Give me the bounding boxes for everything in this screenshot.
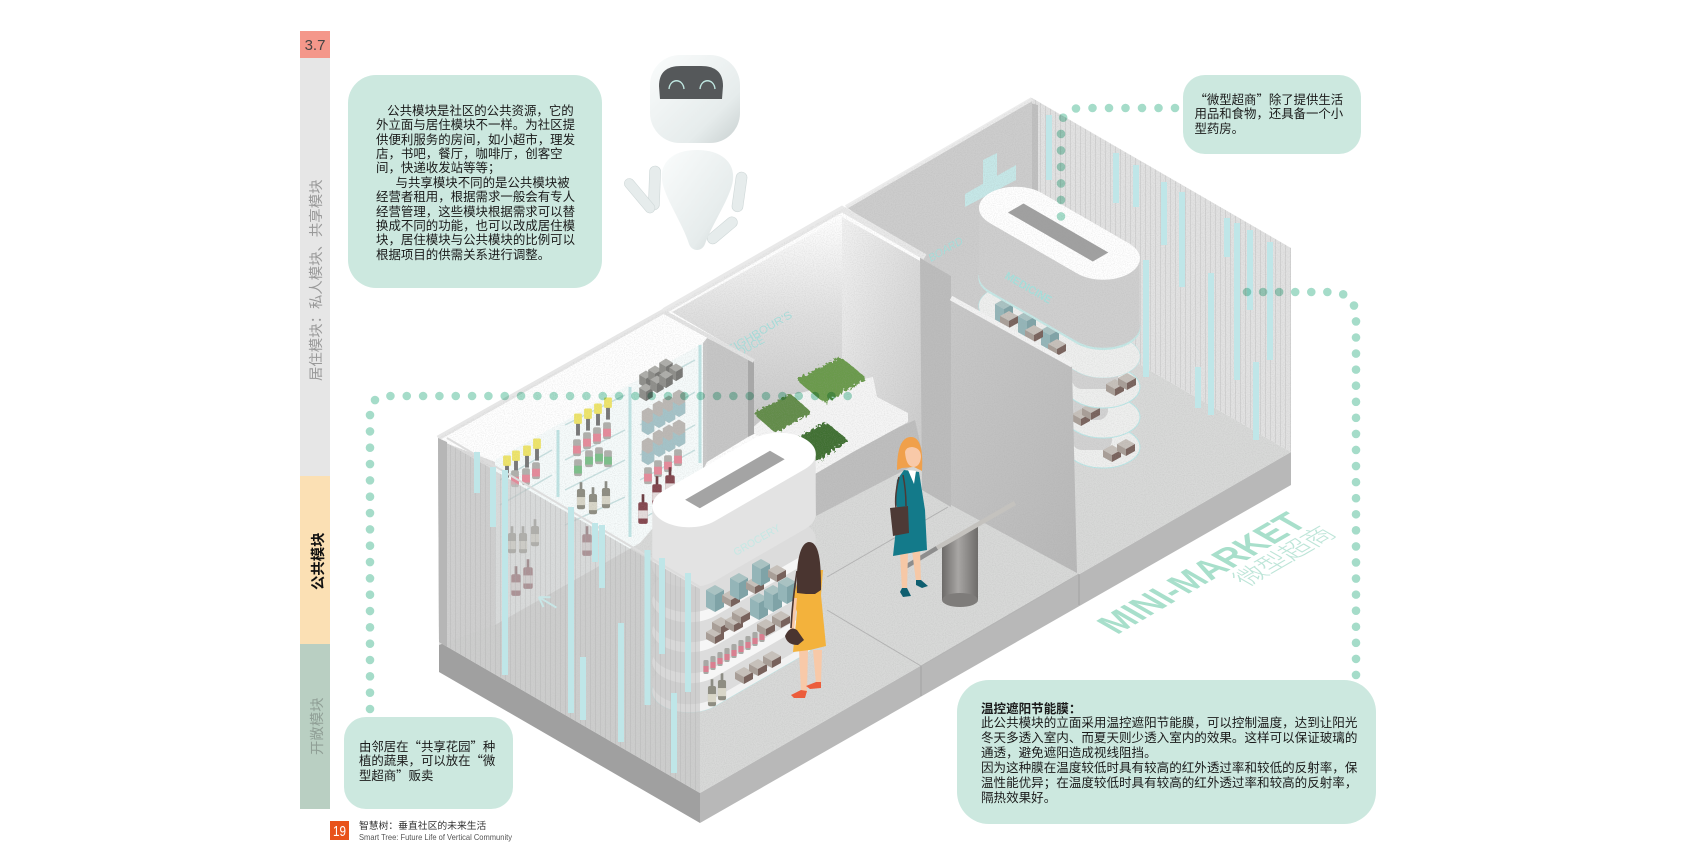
floor joints [827,507,1079,666]
arrow on floor [538,592,556,613]
footer [330,818,513,842]
planter bench [815,420,924,516]
grocery shelving [652,454,816,706]
panel: garden produce note [344,717,513,809]
thermal film text: 隔热效果好。 [981,787,1056,806]
thermal film text: 此公共模块的立面采用温控遮阳节能膜，可以控制温度，达到让阳光 [981,712,1357,731]
thermal film text: 冬天多透入室内、而夏天则少透入室内的效果。这样可以保证玻璃的 [981,727,1357,746]
footer title: 智慧树：垂直社区的未来生活 [359,818,487,832]
top stadium shelf [1016,306,1103,356]
board fin wall [920,258,1077,573]
left glass facade [438,438,700,793]
icon: pharmacy cross [965,153,1016,207]
ceiling and fridge [438,311,707,645]
dotted leader: facade film [1247,292,1356,676]
pharmacy note text: 用品和食物，还具备一个小 [1194,104,1343,122]
back grey wall [846,98,1032,362]
sidebar tab: residential [300,58,330,476]
garden note text: 由邻居在“共享花园”种 [359,737,495,755]
light-blue sun shading bars [474,115,1273,773]
pharmacy note text: “微型超商”除了提供生活 [1194,90,1343,108]
intro text: 间，快递收发站等等； [376,158,500,176]
panel: public module intro [348,75,602,288]
page number: 19 [333,823,346,840]
dotted leader: pharmacy [1061,108,1175,217]
dotted leader: garden to market [370,396,848,709]
glass shelves [500,360,695,525]
footer subtitle: Smart Tree: Future Life of Vertical Community [359,832,513,842]
robot visor [659,66,723,99]
shelf discs [995,299,1140,468]
pharmacy note text: 型药房。 [1194,119,1244,137]
fridge uprights [558,345,700,537]
shelf 3 [689,610,779,662]
pharmacy note text [1194,90,1343,137]
medicine capsule top [1016,208,1103,258]
frame rim [664,209,925,311]
nook walls [672,217,842,434]
label: medicine: MEDICINE [1002,270,1054,307]
panel: thermal film [957,680,1376,824]
subtitle: 微型超商: 微型超商 [1220,519,1345,591]
panel: pharmacy note [1183,75,1361,154]
shelf 4 [689,639,779,691]
sidebar tab: public [300,476,330,644]
turnstile [902,503,1015,607]
label: board: BOARD [926,235,965,265]
thermal film text [981,698,1358,806]
thermal film text: 因为这种膜在温度较低时具有较高的红外透过率和较低的反射率，保 [981,757,1357,776]
section number tab [300,31,330,58]
intro text: 与共享模块不同的是公共模块被 [396,173,570,191]
figure: woman in yellow dress [785,542,826,698]
thermal film text: 通透，避免遮阳造成视线阻挡。 [981,742,1157,761]
floor [439,301,1291,793]
nook label: PRODUCE [718,334,767,370]
intro text: 块，居住模块与公共模块的比例可以 [376,230,575,248]
sidebar tab: open: 开敞模块 [306,697,327,755]
sidebar tab: open [300,644,330,809]
garden note text: 型超商”贩卖 [359,766,433,784]
sidebar [300,31,330,809]
sidebar tab: residential: 居住模块：私人模块、共享模块 [305,180,326,381]
intro text: 经营者租用，根据需求一般会有专人 [376,187,575,205]
right facade wall [1026,98,1291,452]
isometric mini-market model [430,90,1300,830]
title: MINI-MARKET: MINI-MARKET [1088,507,1317,640]
intro text: 公共模块是社区的公共资源，它的 [387,101,574,119]
intro text: 经营管理，这些模块根据需求可以替 [376,202,575,220]
robot arms [622,166,748,246]
medicine capsule body [1016,278,1103,328]
section number tab: 3.7 [305,37,325,54]
partition wall [664,312,754,462]
robot illustration [622,55,748,250]
thermal film text: 温性能优异；在温度较低时具有较高的红外透过率和较高的反射率， [981,772,1357,791]
robot body [662,150,733,250]
intro text [376,101,575,263]
nook label: NEIGHBOUR'S [718,309,795,361]
label: grocery: GROCERY [732,522,783,559]
intro text: 根据项目的供需关系进行调整。 [376,245,550,263]
sidebar tab: public: 公共模块 [307,532,328,590]
neighbours nook [664,209,925,516]
intro text: 换成不同的功能，也可以改成居住模 [376,216,575,234]
grocery capsule top [689,454,779,506]
intro text: 店，书吧，餐厅，咖啡厅，创客空 [376,144,563,162]
robot head [650,55,740,143]
grocery capsule body [689,514,779,566]
garden note text: 植的蔬果，可以放在“微 [359,751,495,769]
fridge side post [703,338,707,470]
intro text: 外立面与居住模块不一样。为社区提 [376,115,575,133]
fridge goods [503,359,685,596]
grass patches [759,361,861,458]
plinth faces [439,452,1291,823]
shelf 2 [689,579,779,631]
shelf 1 [689,549,779,601]
fridge face [495,343,703,625]
garden note text [359,737,495,784]
medicine shelving [979,208,1140,468]
thermal film text: 温控遮阳节能膜： [981,698,1081,716]
surface grain [430,90,1300,830]
intro text: 供便利服务的房间，如小超市，理发 [376,130,575,148]
robot eyes [669,81,715,89]
figure: woman in teal dress [890,437,928,597]
